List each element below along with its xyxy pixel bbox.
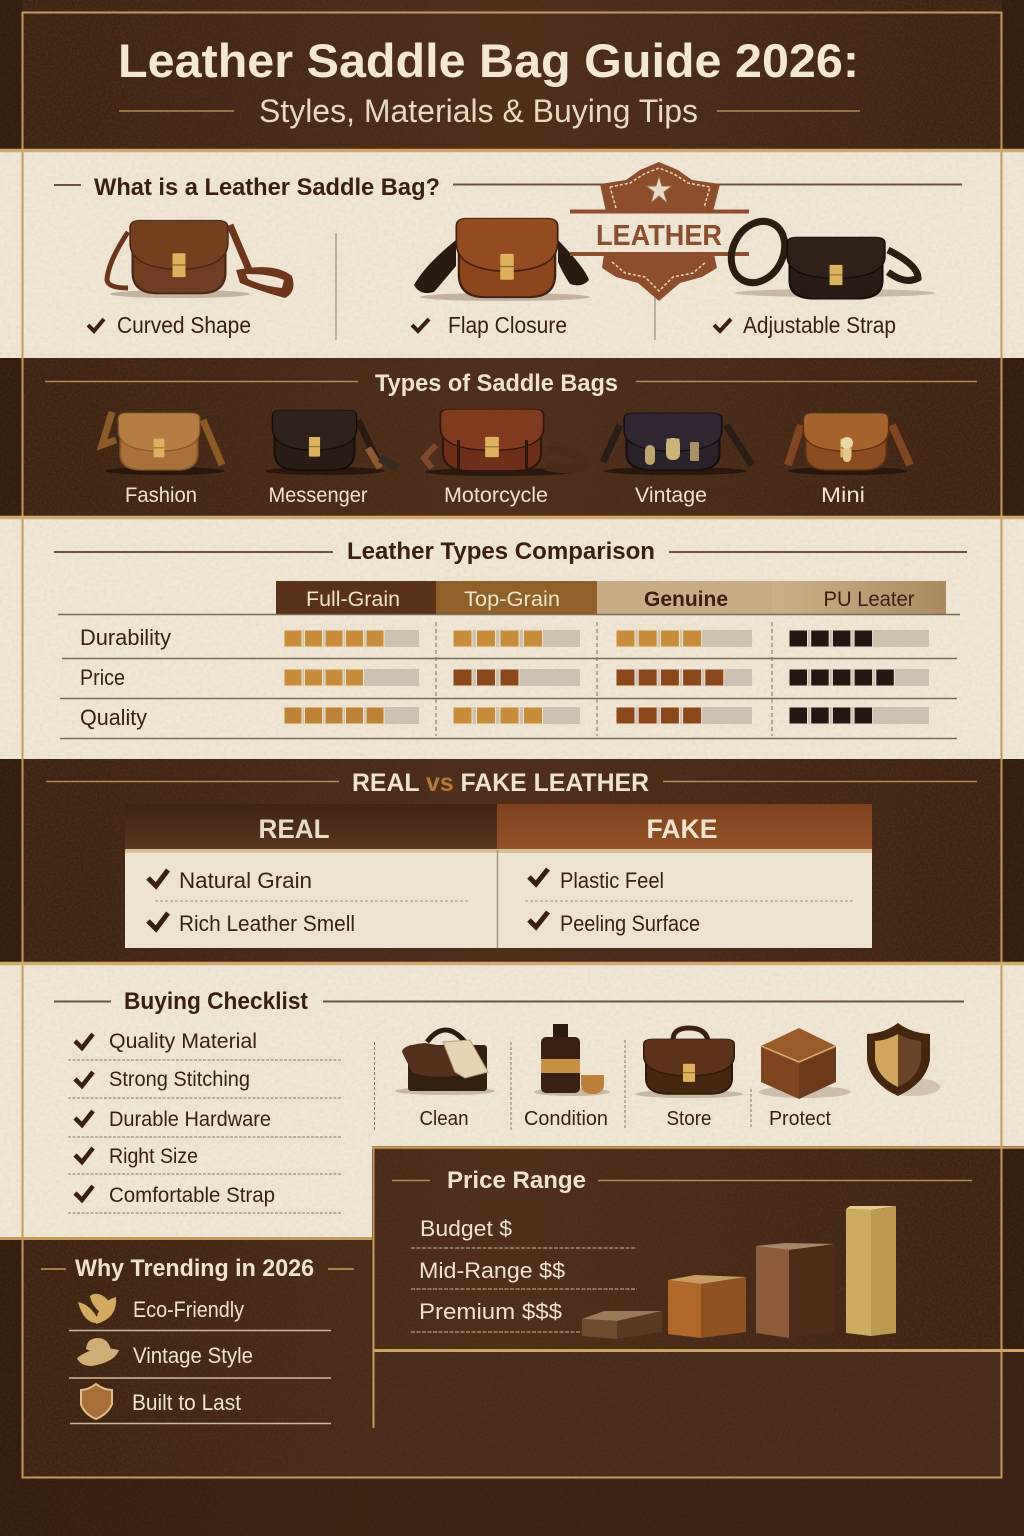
- trending list: [69, 1294, 331, 1424]
- table header: [276, 581, 946, 614]
- cream band: what is: [0, 152, 1024, 358]
- cream band: checklist: [0, 965, 1024, 1238]
- bag: adjustable strap: [721, 212, 935, 300]
- icon: clean: [395, 1030, 495, 1130]
- row labels: Durability: [80, 625, 171, 650]
- table header: PU Leater: [824, 588, 914, 611]
- table header: Full-Grain: [306, 588, 400, 611]
- bar: premium: [756, 1243, 835, 1338]
- bag: flap closure: [414, 218, 590, 301]
- bag type: messenger: Messenger: [268, 484, 368, 507]
- leather badge: [570, 162, 749, 301]
- price list: Budget $: [420, 1216, 512, 1241]
- bag: curved shape: [107, 220, 293, 298]
- bag type: vintage: Vintage: [635, 484, 707, 507]
- paper grain overlay: [0, 152, 1024, 1238]
- leather badge: LEATHER: [596, 220, 722, 252]
- icon: store: [635, 1028, 743, 1130]
- label: curved shape: Curved Shape: [117, 312, 251, 338]
- table header: Genuine: [644, 588, 728, 611]
- rating: genuine: [616, 630, 724, 724]
- bag type: motorcycle: Motorcycle: [444, 484, 548, 507]
- icon: hat: [77, 1338, 119, 1366]
- cream band: comparison: [0, 519, 1024, 759]
- real list: [148, 868, 355, 936]
- panel: real vs fake: [125, 804, 872, 948]
- feature dividers: [336, 233, 655, 340]
- icon: leaf: [78, 1294, 116, 1324]
- heading: what is: What is a Leather Saddle Bag?: [94, 174, 440, 201]
- buying checklist: Quality Material: [109, 1029, 257, 1053]
- bag type: vintage: [603, 413, 752, 507]
- row labels: Price: [80, 665, 125, 690]
- bag type: mini: Mini: [821, 484, 865, 507]
- title: Leather Saddle Bag Guide 2026:: [118, 34, 859, 87]
- bar: luxury: [846, 1206, 896, 1336]
- icon: condition: [524, 1024, 610, 1130]
- row labels: Quality: [80, 705, 147, 730]
- icon: shield: [867, 1023, 940, 1096]
- buying checklist: [68, 1029, 341, 1213]
- heading: buying checklist: Buying Checklist: [124, 988, 308, 1015]
- fake list: Plastic Feel: [560, 868, 664, 893]
- heading: types: Types of Saddle Bags: [375, 370, 618, 397]
- subtitle: Styles, Materials & Buying Tips: [259, 93, 698, 129]
- heading: why trending: Why Trending in 2026: [75, 1255, 314, 1282]
- icon: protect: [759, 1028, 851, 1130]
- buying checklist: Right Size: [109, 1144, 198, 1168]
- price list: Mid-Range $$: [419, 1258, 565, 1283]
- bag type: messenger: [265, 410, 398, 507]
- icon: clean: Clean: [420, 1107, 468, 1130]
- panel: real vs fake: REAL: [258, 814, 330, 844]
- bar: budget: [582, 1311, 662, 1339]
- trending list: Built to Last: [132, 1390, 241, 1415]
- label: adjustable strap: Adjustable Strap: [743, 312, 896, 338]
- price list: Premium $$$: [419, 1299, 562, 1324]
- heading: real vs fake: REAL vs FAKE LEATHER: [352, 769, 649, 797]
- buying checklist: Strong Stitching: [109, 1067, 250, 1091]
- fake list: Peeling Surface: [560, 911, 700, 936]
- icon: small shield: [81, 1384, 112, 1419]
- real list: Rich Leather Smell: [179, 911, 355, 936]
- icon: store: Store: [666, 1107, 712, 1130]
- rating: full-grain: [284, 630, 384, 724]
- table header: Top-Grain: [464, 588, 560, 611]
- rating tracks: [284, 630, 929, 724]
- bag type: motorcycle: [424, 409, 586, 507]
- buying checklist: Comfortable Strap: [109, 1183, 275, 1207]
- price list: [411, 1216, 637, 1332]
- label: flap closure: Flap Closure: [448, 312, 567, 338]
- rating: pu leather: [789, 630, 894, 724]
- icon: condition: Condition: [524, 1107, 608, 1130]
- heading: comparison: Leather Types Comparison: [347, 538, 655, 565]
- care dividers: [374, 1040, 751, 1130]
- lower panel: darker base: [374, 1352, 1024, 1536]
- bag type: mini: [788, 413, 910, 507]
- rating: top-grain: [453, 630, 542, 724]
- bar: mid-range: [668, 1275, 746, 1338]
- trending list: Vintage Style: [133, 1343, 253, 1368]
- trending list: Eco-Friendly: [133, 1297, 244, 1322]
- comparison table: [58, 581, 960, 738]
- row labels: [80, 625, 171, 730]
- real list: Natural Grain: [179, 868, 312, 893]
- panel: real vs fake: FAKE: [646, 814, 718, 844]
- bag type: fashion: Fashion: [125, 484, 197, 507]
- buying checklist: Durable Hardware: [109, 1107, 271, 1131]
- bar chart: price tiers: [582, 1206, 896, 1339]
- icon: protect: Protect: [769, 1107, 831, 1130]
- bag type: fashion: [102, 412, 225, 507]
- heading: price range: Price Range: [447, 1167, 586, 1194]
- fake list: [529, 868, 700, 936]
